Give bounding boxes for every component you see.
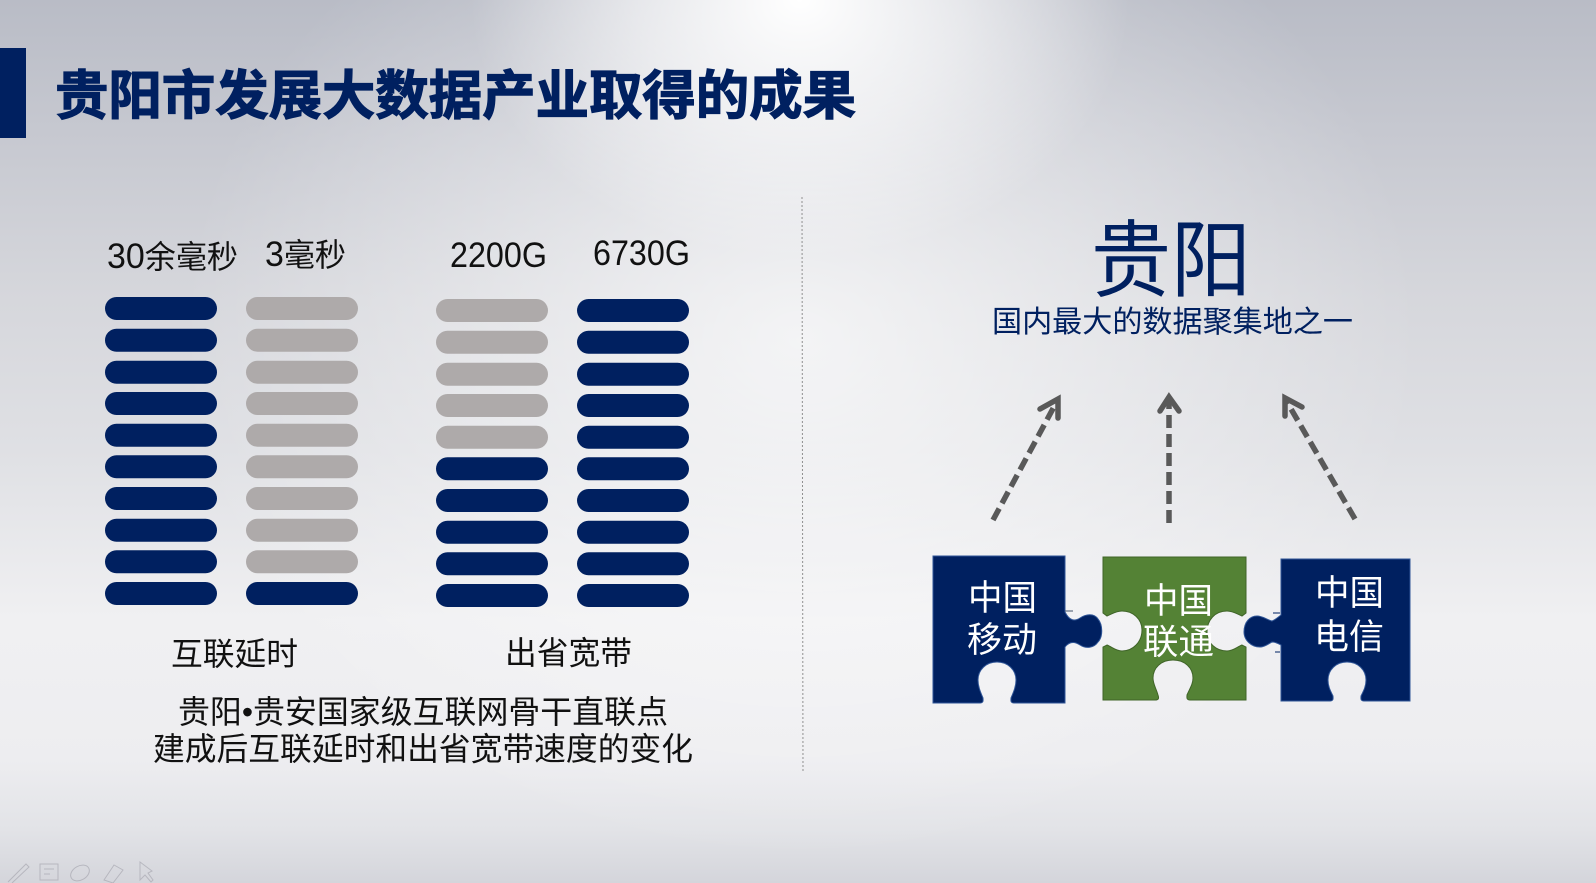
puzzle piece: 中国联通: 联通 (1143, 623, 1214, 662)
caption: 建成后互联延时和出省宽带速度的变化 (153, 731, 693, 767)
puzzle piece: 中国移动 (933, 556, 1102, 703)
value label: 3毫秒: 3毫秒 (265, 235, 346, 274)
bar column: bandwidth after (577, 299, 689, 607)
bar column: latency after (246, 297, 358, 605)
category label: 互联延时: 互联延时 (171, 636, 298, 672)
arrow: middle (1160, 397, 1179, 523)
puzzle piece: 中国联通: 中国 (1144, 582, 1213, 621)
value label: 30余毫秒: 30余毫秒 (107, 237, 238, 276)
panel: latency and bandwidth comparison (105, 234, 693, 767)
arrow: right (1285, 398, 1355, 519)
title accent bar (0, 48, 26, 138)
heading: 贵阳: 贵阳 (1091, 214, 1251, 308)
puzzle piece: 中国电信: 电信 (1314, 618, 1384, 657)
title: 贵阳市发展大数据产业取得的成果 (55, 67, 856, 126)
bar column: latency before (105, 297, 217, 605)
caption: 贵阳•贵安国家级互联网骨干直联点 (178, 694, 668, 730)
bar column: bandwidth before (436, 299, 548, 607)
category label: 出省宽带: 出省宽带 (505, 635, 632, 671)
arrow: left (993, 399, 1058, 520)
puzzle piece: 中国联通 (1103, 557, 1246, 700)
puzzle piece: 中国移动: 移动 (967, 621, 1037, 660)
panel: Guiyang data hub (933, 214, 1410, 703)
toolbar icons (8, 862, 153, 883)
puzzle piece: 中国移动: 中国 (968, 579, 1037, 618)
subheading: 国内最大的数据聚集地之一 (992, 306, 1353, 339)
caption (153, 694, 693, 767)
puzzle piece: 中国电信: 中国 (1315, 574, 1384, 613)
value label: 2200G: 2200G (450, 236, 547, 275)
puzzle piece: 中国电信 (1244, 559, 1410, 701)
value label: 6730G: 6730G (593, 234, 690, 273)
